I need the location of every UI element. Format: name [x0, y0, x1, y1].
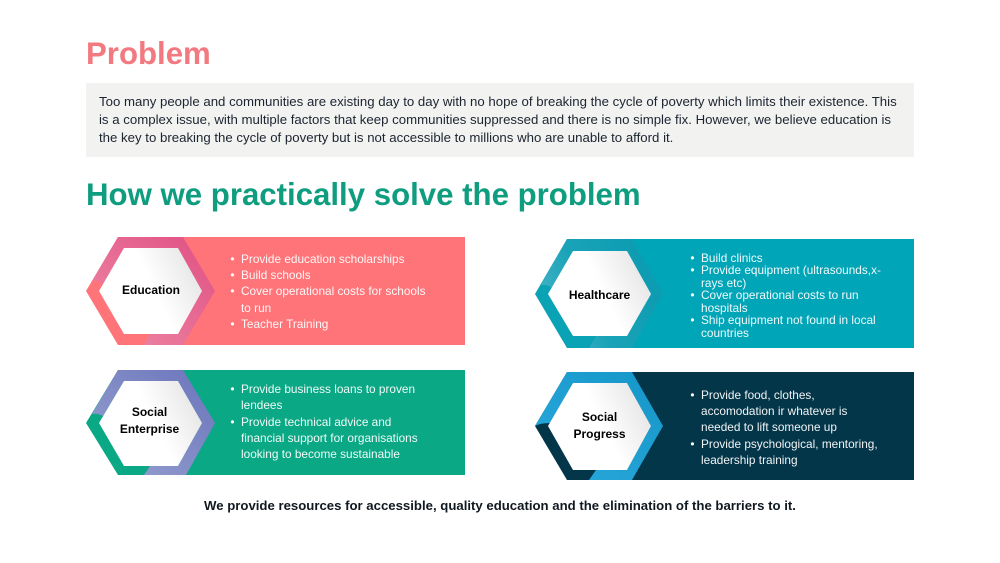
list: Healthcare actions: Ship equipment not found in local	[701, 313, 876, 327]
list: Social Progress actions: accomodation ir whatever is	[701, 404, 847, 418]
list: Healthcare actions: hospitals	[701, 301, 748, 315]
list: Social Progress actions: Provide food, clothes,	[701, 388, 815, 402]
list: Education actions: Teacher Training	[241, 317, 328, 331]
list: Social Enterprise actions: lendees	[241, 398, 282, 412]
list: Education actions: Cover operational costs for schools	[241, 284, 426, 298]
label: Social Progress	[573, 410, 626, 441]
list: Social Enterprise actions: Provide business loans to proven	[241, 382, 415, 396]
label: Social Progress: Progress	[573, 427, 626, 441]
list: Healthcare actions: countries	[701, 326, 749, 340]
list: Education actions: Build schools	[241, 268, 311, 282]
list: Healthcare actions: Build clinics	[701, 251, 763, 265]
list: Social Enterprise actions: looking to become sustainable	[241, 447, 400, 461]
list: Healthcare actions: rays etc)	[701, 276, 746, 290]
heading: How we practically solve the problem: How we practically solve the problem	[86, 177, 641, 212]
list: Healthcare actions: Cover operational costs to run	[701, 288, 859, 302]
panel: problem statement: Too many people and communities are existing day to day with no hope of breaking the cycle of poverty which limits their existence. This	[99, 94, 897, 109]
list: Social Progress actions: needed to lift someone up	[701, 420, 837, 434]
label: Social Enterprise: Enterprise	[120, 422, 179, 436]
card: Social Enterprise	[86, 370, 465, 475]
list: Social Progress actions	[690, 388, 878, 467]
label: Education: Education	[122, 283, 180, 297]
label: Healthcare: Healthcare	[569, 288, 630, 302]
label: Social Progress: Social	[582, 410, 617, 424]
list: Social Enterprise actions: Provide technical advice and	[241, 414, 391, 428]
list: Healthcare actions: Provide equipment (ultrasounds,x-	[701, 263, 881, 277]
list: Social Progress actions: Provide psychological, mentoring,	[701, 437, 878, 451]
list: Healthcare actions	[690, 251, 881, 340]
heading: Problem: Problem	[86, 36, 211, 71]
panel: problem statement	[86, 83, 914, 157]
list: Social Progress actions: leadership training	[701, 453, 798, 467]
list: Social Enterprise actions: financial support for organisations	[241, 431, 418, 445]
list: Social Enterprise actions	[230, 382, 418, 461]
label: Social Enterprise	[120, 405, 179, 436]
closing statement: We provide resources for accessible, quality education and the elimination of the barriers to it.	[204, 498, 796, 513]
list: Education actions: Provide education scholarships	[241, 252, 405, 266]
panel: problem statement: is a complex issue, with multiple factors that keep communities suppressed and there is no simple fix. However, we believe education is	[99, 112, 891, 127]
panel: problem statement: the key to breaking the cycle of poverty but is not accessible to millions who are unable to afford it.	[99, 130, 673, 145]
card: Education	[86, 237, 465, 345]
card: Healthcare	[535, 239, 914, 348]
list: Education actions: to run	[241, 301, 271, 315]
card: Social Progress	[535, 372, 914, 480]
label: Social Enterprise: Social	[132, 405, 167, 419]
list: Education actions	[230, 252, 426, 331]
